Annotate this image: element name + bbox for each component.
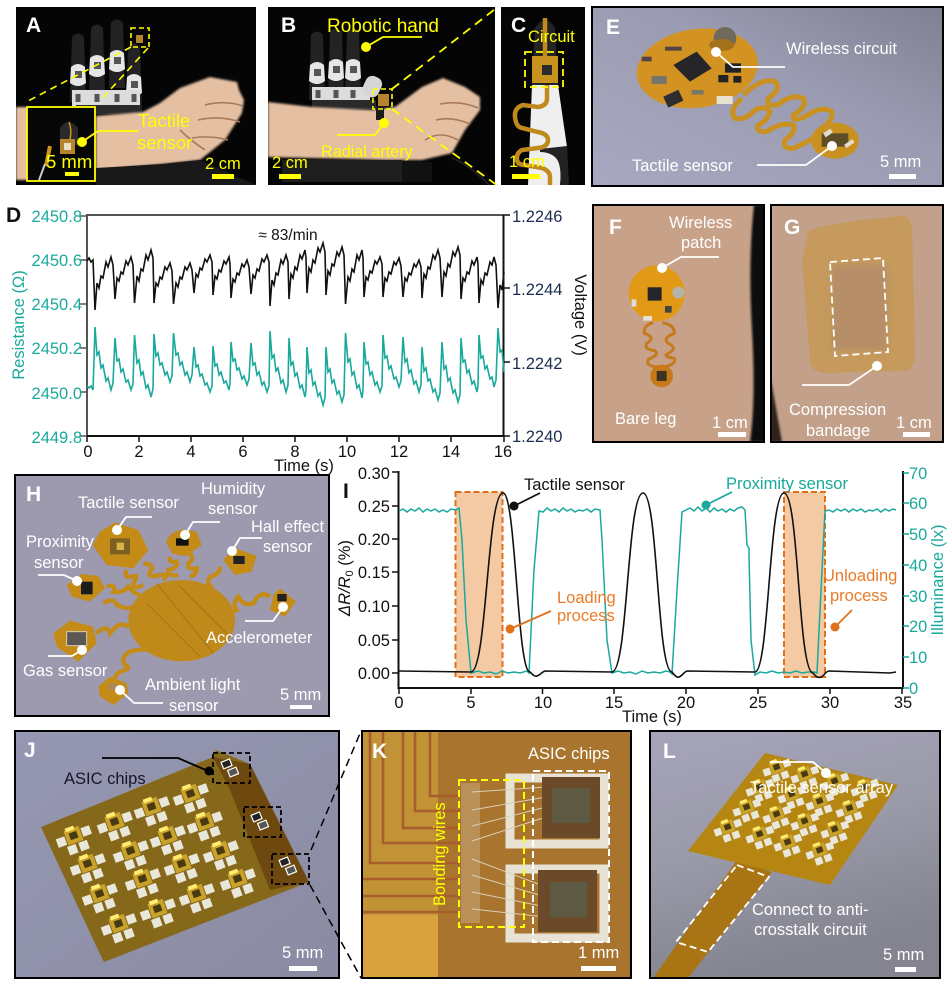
x axis labels: Time (s) xyxy=(274,457,334,475)
scale bar J xyxy=(282,944,323,971)
y axis title: voltage: Voltage (V) xyxy=(571,274,589,356)
label G: G xyxy=(784,216,800,239)
callout: accelerometer: Accelerometer xyxy=(206,629,313,647)
panel K: bonding wire micrograph xyxy=(362,731,631,979)
white frames xyxy=(510,778,604,938)
arm and fist B xyxy=(268,78,480,160)
scale bars A xyxy=(46,151,241,179)
left axis labels I: 0.10 xyxy=(358,598,390,616)
serpentine interconnect xyxy=(515,18,550,185)
callout: tactile sensor array xyxy=(750,762,894,797)
dashed box: circuit xyxy=(525,52,563,87)
panel G: compression bandage xyxy=(771,205,943,442)
callout: loading process: Loading xyxy=(557,589,616,607)
x axis labels: 8 xyxy=(290,443,300,461)
panel L: sensor array with ribbon xyxy=(650,731,940,978)
callout: proximity sensor xyxy=(26,533,95,586)
label I: I xyxy=(343,480,349,503)
right axis labels I: 50 xyxy=(909,526,927,544)
callout: tactile sensor xyxy=(632,141,837,175)
callout: tactile sensor xyxy=(510,476,625,510)
sensor cells xyxy=(53,779,260,946)
callout: radial artery: Radial artery xyxy=(321,143,414,161)
ASIC chip bottom xyxy=(538,870,597,932)
callout: unloading process: process xyxy=(830,587,888,605)
label L: L xyxy=(663,740,676,763)
text: ASIC chips: ASIC chips xyxy=(528,745,610,763)
text: bonding wires: Bonding wires xyxy=(431,802,449,906)
scale bars A: 2 cm xyxy=(205,155,241,173)
text: connect to anti-crosstalk circuit: Connect to anti- xyxy=(752,901,868,919)
resistance curve xyxy=(87,327,504,405)
right axis labels: 1.2242 xyxy=(512,355,562,373)
array patch xyxy=(688,753,898,885)
callout: wireless patch: patch xyxy=(681,234,721,252)
right axis labels I: 40 xyxy=(909,557,927,575)
callout: ASIC chips: ASIC chips xyxy=(64,770,146,788)
annotation: heart rate: ≈ 83/min xyxy=(258,227,318,244)
x axis labels I: 10 xyxy=(534,694,552,712)
callout: hall effect sensor xyxy=(227,518,324,556)
x axis labels: 0 xyxy=(83,443,93,461)
dashed rectangle: sensor location xyxy=(830,258,888,356)
panel A: robotic hand and wrist photo xyxy=(16,7,256,185)
x axis labels: 10 xyxy=(338,443,356,461)
ribbon cable xyxy=(653,860,772,978)
label B: B xyxy=(281,14,296,37)
highlight box: loading xyxy=(456,492,502,677)
callout: ambient light sensor xyxy=(115,676,241,715)
scale bar H: 5 mm xyxy=(280,686,321,704)
robot hand B xyxy=(309,28,384,109)
callout: humidity sensor: sensor xyxy=(208,500,258,518)
x axis labels: 16 xyxy=(494,443,512,461)
right axis labels I: 60 xyxy=(909,495,927,513)
scale bar E xyxy=(880,153,921,179)
label K: K xyxy=(372,740,387,763)
label H: H xyxy=(26,483,41,506)
callout: tactile sensor array: Tactile sensor array xyxy=(750,779,894,797)
panel J: tactile sensor array photo xyxy=(15,731,339,978)
panel F: bare leg xyxy=(593,205,766,442)
right axis labels I: 70 xyxy=(909,465,927,483)
right axis labels I: 30 xyxy=(909,588,927,606)
left axis labels: 2450.0 xyxy=(32,385,82,403)
left axis labels: 2450.2 xyxy=(32,340,82,358)
left axis labels I: 0.25 xyxy=(358,498,390,516)
scale bars A: 5 mm xyxy=(46,151,92,172)
ASIC chips on substrate xyxy=(221,759,297,875)
panel H: multimodal sensor patch xyxy=(15,475,329,716)
wireless PCB xyxy=(636,27,758,108)
dashed box: sensor on fingertip xyxy=(28,28,149,101)
callout: wireless circuit xyxy=(711,40,897,67)
zoom lines B to C xyxy=(392,6,499,186)
callout: humidity sensor xyxy=(180,480,266,540)
y axis title: delta R: (%) xyxy=(336,540,354,570)
x axis labels I: 20 xyxy=(677,694,695,712)
text: circuit: Circuit xyxy=(528,28,575,46)
callout: ambient light sensor: sensor xyxy=(169,697,219,715)
callout: ASIC chips xyxy=(64,758,214,788)
left axis labels I: 0.15 xyxy=(358,564,390,582)
scale bar L xyxy=(883,946,924,972)
scale bar E: 5 mm xyxy=(880,153,921,171)
callout: wireless patch: Wireless xyxy=(669,214,732,232)
panel C: circuit on fingertip xyxy=(501,7,585,185)
chart D: resistance and voltage trace xyxy=(6,204,589,475)
x axis labels I: 0 xyxy=(394,694,404,712)
callout: tactile sensor: Tactile sensor xyxy=(632,157,733,175)
text: bare leg: Bare leg xyxy=(615,410,676,428)
chart I: tactile and proximity signals xyxy=(336,465,947,726)
left axis labels I: 0.05 xyxy=(358,632,390,650)
sensor pads xyxy=(53,523,296,705)
callout: tactile sensor xyxy=(78,494,179,535)
scale bar J: 5 mm xyxy=(282,944,323,962)
copper traces xyxy=(362,731,460,912)
scale bar K xyxy=(578,944,619,971)
callout: hall effect sensor: sensor xyxy=(263,538,313,556)
callout: unloading process xyxy=(823,567,897,632)
callout: humidity sensor: Humidity xyxy=(201,480,266,498)
right axis labels I: 10 xyxy=(909,649,927,667)
dashed box: sensor on wrist xyxy=(373,89,392,109)
x axis labels xyxy=(83,443,512,475)
y axis title: delta R: 0 xyxy=(344,570,356,576)
callout: loading process xyxy=(506,589,616,634)
x axis labels I: 25 xyxy=(749,694,767,712)
x axis labels I: 35 xyxy=(894,694,912,712)
callout: proximity sensor: Proximity xyxy=(26,533,95,551)
y axis title: resistance: Resistance (Ω) xyxy=(10,270,28,380)
dashed box: ribbon xyxy=(676,865,769,952)
callout: proximity sensor xyxy=(702,475,848,510)
left axis labels I: 0.00 xyxy=(358,665,390,683)
right axis labels I xyxy=(909,465,927,698)
callout: robotic hand xyxy=(327,16,439,52)
callout: radial artery xyxy=(321,118,414,161)
sensors xyxy=(110,538,130,554)
x axis labels I: Time (s) xyxy=(622,708,682,726)
scale bar L: 5 mm xyxy=(883,946,924,964)
callout: tactile sensor: Tactile sensor xyxy=(78,494,179,512)
callout: ambient light sensor: Ambient light xyxy=(145,676,241,694)
dashed boxes: ASIC chips xyxy=(213,753,309,884)
label J: J xyxy=(24,739,36,762)
label C: C xyxy=(511,14,526,37)
y axis title: illuminance: Illuminance (lx) xyxy=(929,525,947,635)
text: connect to anti-crosstalk circuit: crosstalk circuit xyxy=(754,921,867,939)
ASIC chip top xyxy=(542,777,600,838)
callout: robotic hand: Robotic hand xyxy=(327,16,439,37)
callout: proximity sensor: sensor xyxy=(34,554,84,572)
right axis labels xyxy=(512,208,562,446)
x axis labels I: 5 xyxy=(466,694,476,712)
inset: tactile sensor closeup xyxy=(27,107,95,181)
substrate gold areas xyxy=(362,731,438,915)
callout: compression bandage: Compression xyxy=(789,401,886,419)
bandage xyxy=(802,216,915,373)
right axis labels: 1.2244 xyxy=(512,281,562,299)
bond pads strip xyxy=(461,783,480,923)
callout: tactile sensor: sensor xyxy=(137,132,192,153)
x axis labels: 14 xyxy=(442,443,460,461)
text: connect to anti-crosstalk circuit xyxy=(752,901,868,939)
x axis labels I: 30 xyxy=(821,694,839,712)
callout: tactile sensor xyxy=(77,110,192,153)
callout: tactile sensor: Tactile xyxy=(138,110,190,131)
left axis labels xyxy=(32,208,82,447)
x axis labels: 12 xyxy=(390,443,408,461)
dashed box: ASIC chips xyxy=(533,771,609,942)
left axis labels I: 0.20 xyxy=(358,531,390,549)
arm and fist A xyxy=(16,77,244,180)
serpentine interconnect E xyxy=(733,81,832,148)
flexible substrate xyxy=(41,750,309,962)
circuit patch xyxy=(532,56,558,83)
dashed box: bonding wires xyxy=(459,780,524,927)
x axis labels: 4 xyxy=(186,443,196,461)
voltage curve xyxy=(87,243,504,310)
label E: E xyxy=(606,16,620,39)
right axis labels: 1.2240 xyxy=(512,428,562,446)
wireless patch xyxy=(629,265,685,387)
callout: compression bandage xyxy=(789,361,886,440)
array cells xyxy=(711,755,883,868)
callout: loading process: process xyxy=(557,607,615,625)
panel borders top xyxy=(592,7,943,442)
callout: gas sensor: Gas sensor xyxy=(23,662,108,680)
callout: accelerometer xyxy=(206,602,313,647)
right axis labels: 1.2246 xyxy=(512,208,562,226)
left axis labels I: 0.30 xyxy=(358,465,390,483)
scale bar F: 1 cm xyxy=(712,414,748,432)
scale bar B: 2 cm xyxy=(272,154,308,172)
left axis labels I xyxy=(358,465,390,683)
tactile curve xyxy=(399,493,896,677)
callout: gas sensor xyxy=(23,645,108,680)
panel E: wireless circuit photo xyxy=(592,7,943,186)
robot hand A xyxy=(70,20,142,114)
scale bar K: 1 mm xyxy=(578,944,619,962)
finger xyxy=(532,20,558,85)
callout: wireless circuit: Wireless circuit xyxy=(786,40,897,58)
label F: F xyxy=(609,216,622,239)
proximity curve xyxy=(399,507,896,675)
x axis labels I xyxy=(394,694,912,726)
label A: A xyxy=(26,14,41,37)
callout: compression bandage: bandage xyxy=(806,422,870,440)
label D: D xyxy=(6,204,21,227)
right axis labels I: 20 xyxy=(909,618,927,636)
axes D xyxy=(80,215,510,442)
callout: proximity sensor: Proximity sensor xyxy=(726,475,848,493)
scale bar C: 1 cm xyxy=(509,153,545,171)
callout: unloading process: Unloading xyxy=(823,567,897,585)
right axis labels I: 0 xyxy=(909,680,918,698)
x axis labels: 2 xyxy=(134,443,144,461)
central hub xyxy=(128,580,235,661)
x axis labels: 6 xyxy=(238,443,248,461)
panel B: robotic hand on radial artery xyxy=(268,7,495,186)
interconnects xyxy=(97,550,270,683)
callout: wireless patch xyxy=(657,214,732,273)
zoom lines J to K xyxy=(310,731,361,978)
left axis labels: 2450.4 xyxy=(32,296,82,314)
y axis title: delta R: ΔR/R xyxy=(336,576,354,617)
left axis labels: 2450.6 xyxy=(32,252,82,270)
left axis labels: 2449.8 xyxy=(32,429,82,447)
scale bar G: 1 cm xyxy=(896,414,932,432)
highlight box: unloading xyxy=(784,492,825,677)
callout: tactile sensor: Tactile sensor xyxy=(524,476,625,494)
scale bar C xyxy=(509,153,545,179)
tactile sensor disk xyxy=(811,123,859,159)
callout: hall effect sensor: Hall effect xyxy=(251,518,324,536)
left axis labels: 2450.8 xyxy=(32,208,82,226)
bonding wires xyxy=(472,787,546,917)
x axis labels I: 15 xyxy=(605,694,623,712)
axes I xyxy=(392,471,909,694)
